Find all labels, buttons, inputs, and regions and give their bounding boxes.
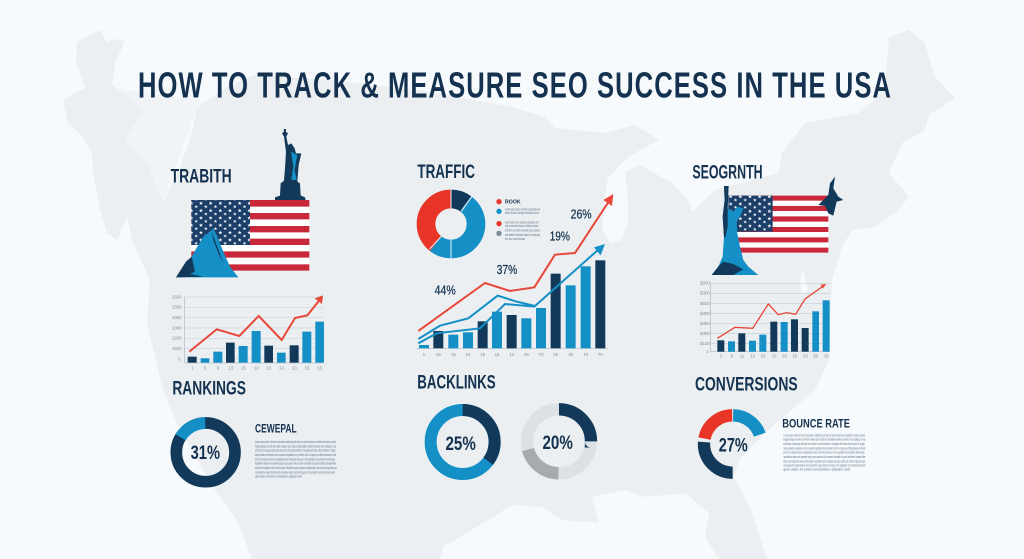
bar chart: SEO growth: $100 bbox=[700, 341, 710, 346]
combo chart: traffic growth: 15 bbox=[495, 352, 500, 357]
combo chart: traffic growth: 19 bbox=[466, 352, 471, 357]
text block bbox=[783, 433, 865, 471]
bar chart: SEO growth: 1 bbox=[706, 349, 709, 354]
legend: Lorem ipsum dolor sit amet consectetur elit bbox=[505, 220, 538, 224]
heading: Conversions: CONVERSIONS bbox=[695, 375, 798, 396]
label: 37%: 37% bbox=[497, 263, 517, 277]
bar chart: SEO growth: 15 bbox=[792, 354, 798, 359]
bar chart: growth: 10 bbox=[292, 365, 297, 370]
text block: anim id est laborum sed ut perspiciatis unde omnis iste natus error sit voluptatem accusantium doloremque bbox=[783, 451, 865, 455]
donut value: 31%: 31% bbox=[191, 443, 220, 464]
panel: right column bbox=[692, 162, 843, 359]
combo chart: traffic growth: 25 bbox=[524, 352, 529, 357]
bar chart: SEO growth: 12 bbox=[750, 354, 756, 359]
text block: magna aliqua ut enim ad minim veniam quis nostrud exercitation ullamco laboris nisi ut aliquip ex ea bbox=[255, 444, 336, 448]
label: 44%: 44% bbox=[435, 283, 456, 297]
bar chart: growth: 9 bbox=[217, 365, 220, 370]
label: 26%: 26% bbox=[571, 207, 592, 221]
heading: Rankings: RANKINGS bbox=[172, 379, 246, 400]
bar chart: SEO growth: 13 bbox=[803, 354, 808, 359]
bar chart: growth: 1000 bbox=[172, 325, 182, 330]
text block: quia dolor sit amet consectetur adipisci velit bbox=[255, 475, 302, 479]
combo chart: traffic growth: 13 bbox=[509, 352, 515, 357]
heading: Backlinks: BACKLINKS bbox=[417, 373, 496, 394]
bar chart: growth: 1300 bbox=[172, 305, 182, 310]
legend: ut enim ad minim veniam quis nostrud bbox=[505, 229, 540, 233]
combo chart: traffic growth: T0 bbox=[583, 352, 589, 357]
label: 19%: 19% bbox=[550, 230, 570, 244]
donut chart: 31% bbox=[176, 423, 235, 482]
bar chart: SEO growth: 11 bbox=[740, 354, 745, 359]
bar chart: SEO growth: $300 bbox=[700, 291, 710, 296]
bar chart: growth: 5 bbox=[204, 365, 207, 370]
legend: sed do eiusmod tempor incididunt labore bbox=[505, 211, 539, 215]
legend: sed do eiusmod tempor incididunt labore bbox=[505, 224, 538, 228]
subheading: Cewepal: CEWEPAL bbox=[255, 422, 297, 436]
text block: Lorem ipsum dolor sit amet consectetur adipiscing elit sed do eiusmod tempor incididunt ut labore dolore bbox=[255, 440, 336, 444]
bar chart: SEO growth: 18 bbox=[782, 354, 787, 359]
icon: small statue silhouette bbox=[818, 177, 843, 216]
bar chart: growth: 13 bbox=[279, 365, 284, 370]
combo chart: traffic growth: 15 bbox=[451, 352, 456, 357]
text block: consequuntur magni dolores eos qui ratione sequi nesciunt neque porro quisquam est qui dolorem ipsum bbox=[255, 470, 335, 474]
heading: Seogrnth: SEOGRNTH bbox=[692, 162, 763, 183]
bar chart: SEO growth bbox=[700, 281, 830, 359]
text block: commodo consequat duis aute irure dolor in reprehenderit in voluptate velit esse cillum dolore eu fugiat bbox=[255, 449, 335, 453]
bar chart: SEO growth: 15 bbox=[761, 354, 766, 359]
bar chart: SEO growth: $020 bbox=[700, 301, 710, 306]
text block: dicta sunt explicabo nemo enim ipsam voluptatem quia voluptas sit aspernatur aut odit aut fugit sed quia bbox=[255, 466, 337, 470]
bar chart: SEO growth: $200 bbox=[700, 281, 710, 286]
donut chart: 27% bbox=[704, 415, 761, 473]
text block: Lorem ipsum dolor sit amet consectetur adipiscing elit sed do eiusmod tempor incididunt ut labore dolore bbox=[783, 433, 865, 437]
bar chart: growth: 1500 bbox=[172, 346, 182, 351]
combo chart: traffic growth: 15 bbox=[436, 352, 441, 357]
heading: Traffic: TRAFFIC bbox=[417, 162, 475, 183]
bar chart: SEO growth: 8 bbox=[730, 354, 733, 359]
bar chart: SEO growth: 50 bbox=[813, 354, 819, 359]
bar chart: growth: 15 bbox=[241, 365, 246, 370]
donut value: 20%: 20% bbox=[542, 433, 573, 454]
bar chart: growth: 13 bbox=[228, 365, 234, 370]
combo chart: traffic growth: T0 bbox=[598, 352, 603, 357]
bar chart: SEO growth: $450 bbox=[700, 321, 710, 326]
legend: exercitation ullamco laboris nisi aliquip bbox=[505, 233, 540, 237]
legend: Lorem ipsum dolor sit amet consectetur elit bbox=[505, 207, 540, 211]
text block: nulla pariatur excepteur sint occaecat cupidatat non proident sunt in culpa qui officia deserunt mollit bbox=[783, 446, 865, 450]
text block: commodo consequat duis aute irure dolor in reprehenderit in voluptate velit esse cillum dolore eu fugiat bbox=[783, 442, 865, 446]
icon: blue mountain bbox=[176, 228, 238, 277]
bar chart: SEO growth: 10 bbox=[824, 354, 829, 359]
icon: Statue of Liberty bbox=[275, 129, 306, 200]
bar chart: growth bbox=[172, 294, 324, 370]
icon: American flag bbox=[728, 196, 828, 253]
legend: ROOK bbox=[505, 200, 521, 206]
donut chart: 25% bbox=[431, 410, 495, 474]
combo chart: traffic growth: 30 bbox=[568, 352, 574, 357]
panel: backlinks second donut bbox=[527, 375, 865, 473]
bar chart: SEO growth: $300 bbox=[700, 311, 710, 316]
bar chart: growth: 15 bbox=[317, 365, 323, 370]
bar chart: SEO growth: $300 bbox=[700, 331, 710, 336]
bar chart: growth: 1 bbox=[191, 365, 194, 370]
bar chart: growth: 1050 bbox=[172, 315, 182, 320]
icon: Statue of Liberty bbox=[712, 186, 758, 275]
text block: dicta sunt explicabo nemo enim ipsam voluptatem quia voluptas sit aspernatur aut odit aut fugit sed quia bbox=[783, 459, 865, 463]
combo chart: traffic growth bbox=[417, 194, 613, 357]
text block: nulla pariatur excepteur sint occaecat cupidatat non proident sunt in culpa qui officia deserunt mollit bbox=[255, 453, 336, 457]
donut value: 25%: 25% bbox=[445, 434, 476, 455]
panel: traffic bbox=[417, 162, 613, 357]
panel: left column bbox=[171, 129, 324, 370]
subheading: Bounce rate: BOUNCE RATE bbox=[782, 416, 850, 430]
legend bbox=[496, 199, 540, 241]
bar chart: SEO growth: 1 bbox=[720, 354, 723, 359]
text block: magna aliqua ut enim ad minim veniam quis nostrud exercitation ullamco laboris nisi ut aliquip ex ea bbox=[783, 438, 865, 442]
heading: Trabith: TRABITH bbox=[171, 166, 232, 187]
combo chart: traffic growth: 25 bbox=[553, 352, 559, 357]
bar chart: SEO growth: 10 bbox=[772, 354, 777, 359]
combo chart: traffic growth: T0 bbox=[538, 352, 544, 357]
donut value: 27%: 27% bbox=[719, 436, 748, 457]
bar chart: growth: 1200 bbox=[172, 336, 182, 341]
text block: quia dolor sit amet consectetur adipisci velit bbox=[783, 467, 850, 471]
text block: consequuntur magni dolores eos qui ratione sequi nesciunt neque porro quisquam est qui dolorem ipsum bbox=[783, 464, 865, 468]
legend: ex ea commodo bbox=[505, 237, 525, 241]
donut chart: 20% bbox=[527, 409, 591, 473]
bar chart: growth: 10 bbox=[254, 365, 259, 370]
text block: laudantium totam rem aperiam eaque ipsa quae ab illo inventore veritatis et quasi architecto beatae vitae bbox=[255, 462, 336, 466]
panel: rankings bbox=[172, 373, 496, 482]
donut chart: traffic bbox=[426, 190, 476, 258]
text block bbox=[255, 440, 337, 479]
bar chart: growth: 1500 bbox=[172, 294, 182, 299]
combo chart: traffic growth: 1 bbox=[423, 352, 426, 357]
combo chart: traffic growth: 19 bbox=[480, 352, 486, 357]
bar chart: growth: 13 bbox=[266, 365, 272, 370]
icon: American flag bbox=[191, 200, 309, 271]
text block: anim id est laborum sed ut perspiciatis unde omnis iste natus error sit voluptatem accusantium doloremque bbox=[255, 457, 335, 461]
bar chart: growth: 0 bbox=[178, 357, 181, 362]
text block: laudantium totam rem aperiam eaque ipsa quae ab illo inventore veritatis et quasi architecto beatae vitae bbox=[783, 455, 865, 459]
bar chart: growth: 15 bbox=[305, 365, 310, 370]
